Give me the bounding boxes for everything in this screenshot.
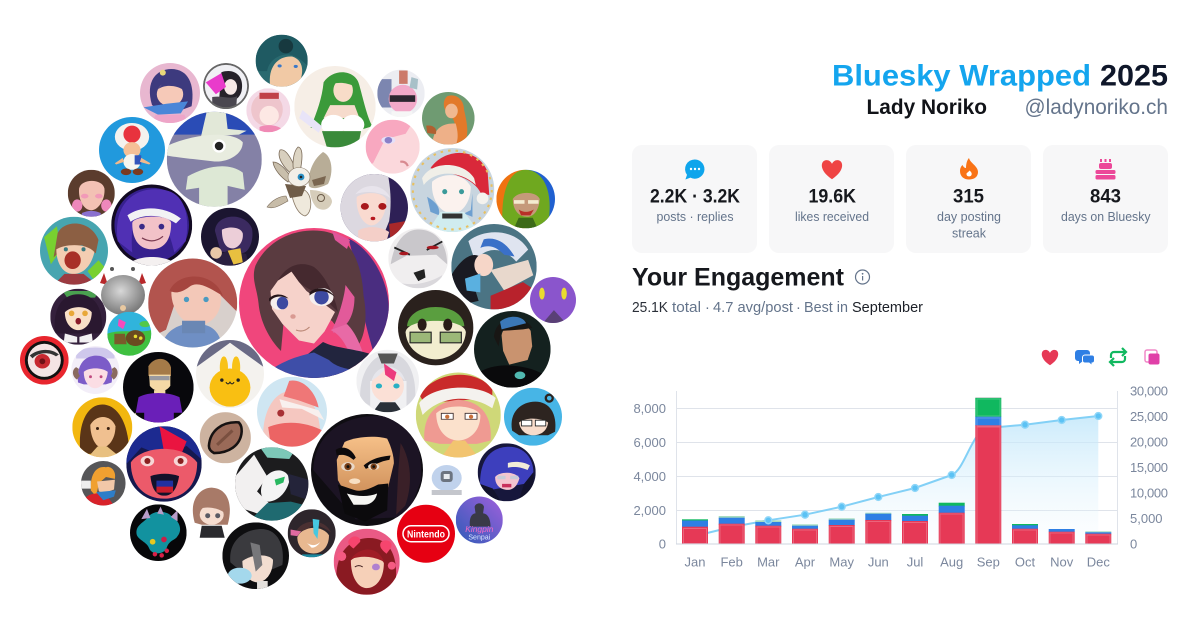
bar: Jul — [902, 514, 928, 544]
avatar: plague doctor — [167, 112, 262, 207]
stat card: likes received — [769, 145, 894, 253]
avatar: Nintendo logo — [397, 505, 455, 563]
stat card: day posting streak: streak — [952, 226, 986, 240]
avatar: moth illustration — [267, 147, 332, 216]
profile name: Lady Noriko — [866, 96, 987, 119]
chart baseline — [676, 543, 1118, 545]
avatar: Nintendo logo: Nintendo — [407, 529, 445, 541]
left axis labels: 8,000 — [633, 401, 666, 416]
avatar: brown haired chibi — [193, 488, 230, 538]
avatar: pixel football — [200, 412, 251, 463]
bar: May — [829, 518, 855, 544]
month axis labels: May — [829, 554, 854, 570]
avatar: bearded man with long dark hair — [311, 414, 423, 526]
avatar: black haired with blue bubble — [222, 522, 289, 589]
stat card: days on Bluesky: 843 — [1090, 186, 1121, 208]
avatar: black and white gothic girl — [203, 63, 249, 109]
avatar: purple ghost — [530, 277, 576, 323]
avatar: creature with green hat and glasses — [398, 290, 473, 365]
avatar: red face with open mouth — [126, 426, 202, 502]
line markers — [765, 413, 1102, 524]
avatar: Kingpin Senpai logo: Kingpin — [465, 524, 494, 534]
avatar: shouting brown haired character — [40, 217, 108, 285]
month axis labels: Mar — [757, 554, 780, 570]
avatar: pale girl with red eyes — [388, 228, 448, 288]
icon: heart — [822, 160, 842, 179]
avatar: man with cap in profile — [474, 311, 551, 388]
avatar: silver ball creature — [100, 267, 146, 315]
avatar: dark haired maid with bow — [50, 289, 106, 345]
avatar: Toad — [99, 117, 165, 183]
avatar: red eye with red ring — [20, 336, 69, 385]
right axis labels: 30,000 — [1130, 384, 1168, 398]
month axis labels: Sep — [977, 554, 1000, 570]
stat card: posts and replies: posts · replies — [656, 209, 734, 224]
avatar: dark haired girl with yellow tie — [201, 208, 259, 266]
right axis labels: 5,000 — [1130, 511, 1163, 526]
engagement summary line: 25.1K — [632, 300, 668, 316]
stacked monthly bars — [682, 397, 1111, 544]
left axis labels: 4,000 — [633, 469, 666, 484]
month axis labels: Feb — [720, 554, 743, 570]
stat card: posts and replies — [632, 145, 757, 253]
engagement summary line: 4.7 avg/post — [713, 300, 793, 316]
avatar: pink creature in santa hat — [257, 377, 327, 447]
avatar: pink pig character — [377, 70, 425, 117]
avatar: brown haired woman — [68, 170, 115, 217]
right axis labels — [1130, 384, 1168, 552]
profile handle: @ladynoriko.ch — [1024, 96, 1168, 119]
right axis labels: 25,000 — [1130, 409, 1168, 424]
month axis labels: Dec — [1087, 554, 1110, 570]
engagement summary line: September — [852, 300, 923, 316]
month axis labels: Aug — [940, 554, 963, 570]
avatar: orange haired guy with scarf — [81, 461, 126, 506]
avatar: Kingpin Senpai logo: Senpai — [468, 535, 491, 542]
month axis labels: Oct — [1015, 554, 1035, 570]
cumulative line — [695, 416, 1098, 536]
month axis labels: Jun — [868, 554, 889, 570]
combined engagement chart — [633, 384, 1168, 570]
avatar: large main profile anime girl — [239, 228, 389, 378]
avatar: chibi with glasses on blue — [504, 388, 562, 446]
bar: Feb — [719, 516, 745, 544]
month axis labels: Nov — [1050, 554, 1074, 570]
avatar: teal ghost monster — [130, 504, 187, 561]
bar: Jan — [682, 519, 708, 544]
bar: Jun — [865, 513, 891, 544]
avatar: purple hair girl with scarf — [140, 63, 200, 123]
icon: flame — [960, 158, 978, 180]
month axis labels: Jul — [907, 554, 923, 570]
bar inner highlights — [684, 399, 1110, 544]
avatar: yellow bunny — [196, 340, 264, 408]
stat card: day posting streak: day posting — [937, 209, 1001, 224]
avatar: girl with cyan streak — [288, 509, 336, 557]
month axis labels: Jan — [685, 554, 705, 570]
stat card: likes received: likes received — [795, 209, 869, 224]
avatar: white haired santa girl — [410, 148, 494, 232]
engagement summary line: Best in — [804, 300, 848, 316]
icon: info — [856, 270, 870, 284]
avatar: santa hat pink haired girl — [416, 372, 501, 458]
right axis labels: 15,000 — [1130, 460, 1168, 475]
avatar: silver and pink haired android girl — [356, 350, 419, 412]
right axis labels: 10,000 — [1130, 486, 1168, 500]
legend icon: reposts — [1110, 348, 1126, 366]
bar: Dec — [1085, 531, 1111, 544]
avatar: teal hair character — [256, 35, 308, 87]
left axis labels: 6,000 — [633, 435, 666, 450]
legend icon: quotes — [1145, 350, 1160, 364]
avatar: dark blue haired girl — [478, 443, 536, 501]
engagement summary line: total — [672, 300, 701, 316]
avatar: red haired elf — [148, 258, 237, 348]
left axis labels: 0 — [659, 536, 666, 552]
avatar: orange haired figure — [422, 92, 475, 145]
bar: Apr — [792, 524, 818, 544]
legend icon: likes — [1042, 350, 1058, 365]
avatar: Kingpin Senpai logo — [456, 496, 503, 544]
stat card: days on Bluesky — [1043, 145, 1168, 253]
bar: Oct — [1012, 524, 1038, 544]
stat card: day posting streak: 315 — [953, 186, 984, 208]
stat card: day posting streak — [906, 145, 1031, 253]
right axis labels: 0 — [1130, 536, 1137, 552]
bar: Nov — [1049, 529, 1075, 544]
month axis labels — [685, 554, 1110, 570]
avatar: black and white wolf — [235, 447, 308, 521]
chart legend icons — [1042, 348, 1160, 366]
bar: Sep — [975, 397, 1001, 544]
avatar: digimon device logo — [432, 465, 462, 495]
engagement summary line — [632, 300, 923, 316]
avatar: man with purple hair and headband — [111, 184, 192, 266]
avatar: girl with hearts — [334, 529, 400, 595]
month axis labels: Apr — [795, 554, 816, 570]
stat card: posts and replies: 2.2K · 3.2K — [650, 186, 740, 208]
avatar: purple haired horned maid — [71, 346, 119, 394]
stat card: days on Bluesky: days on Bluesky — [1061, 209, 1151, 224]
icon: birthday cake — [1096, 159, 1116, 180]
avatar: plant game characters — [107, 312, 151, 356]
title: Bluesky Wrapped — [832, 60, 1091, 92]
avatar: green haired cat — [496, 170, 555, 228]
bar: Mar — [755, 520, 781, 544]
avatar: white haired girl with red eyes — [341, 174, 408, 241]
bar: Aug — [939, 503, 965, 544]
avatar: green haired woman — [294, 66, 376, 147]
left axis labels — [633, 401, 666, 552]
chart grid — [676, 391, 1118, 544]
avatar: pink haired girl — [246, 88, 290, 132]
engagement summary line: · — [796, 300, 801, 316]
legend icon: replies — [1075, 350, 1094, 366]
cumulative area — [695, 416, 1098, 544]
right axis labels: 20,000 — [1130, 434, 1168, 450]
icon: chat bubble — [685, 159, 704, 180]
avatar: brown haired man on yellow — [72, 397, 132, 457]
avatar bubble cluster — [20, 35, 576, 595]
avatar: black and blue hair girl in red — [451, 224, 537, 309]
avatar: man in purple shirt — [123, 352, 194, 423]
stat card: likes received: 19.6K — [808, 186, 856, 208]
heading: Your Engagement: Your Engagement — [632, 264, 845, 292]
engagement summary line: · — [705, 300, 710, 316]
title: 2025 — [1100, 60, 1168, 92]
avatar: pink soft hair girl — [366, 120, 420, 174]
left axis labels: 2,000 — [633, 503, 666, 518]
